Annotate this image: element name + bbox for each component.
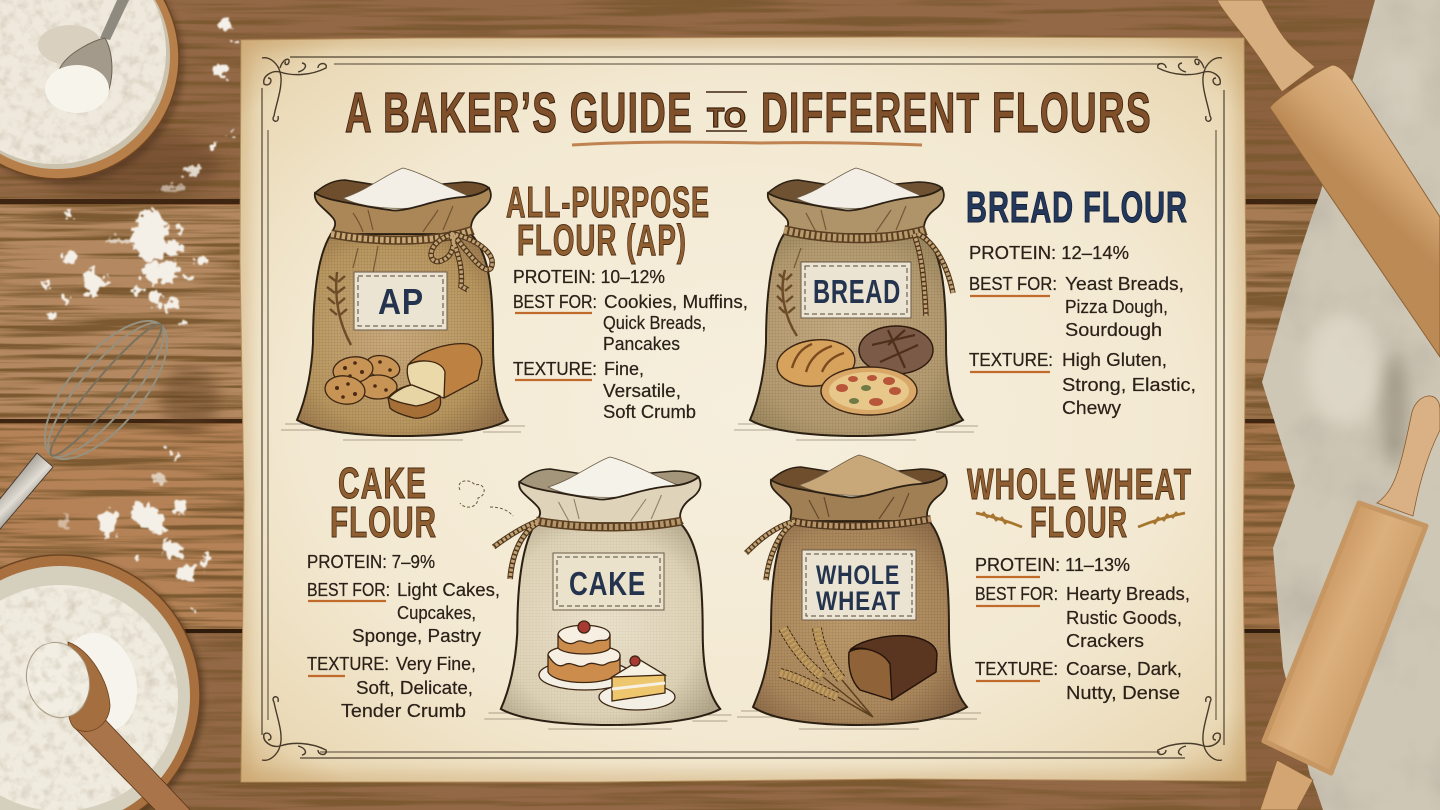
text: cake flour: CAKE [338, 459, 427, 508]
text: all-purpose flour: BEST FOR: [513, 291, 597, 312]
title [345, 81, 1152, 145]
text: cake flour: Light Cakes, [397, 580, 500, 600]
icon: dark loaf [849, 636, 937, 700]
icon: wheat ears [976, 512, 1185, 527]
parchment panel [240, 37, 1246, 782]
text: cake flour: TEXTURE: [307, 653, 389, 674]
sack: bread [734, 168, 978, 440]
corner flourish bottom left [262, 697, 326, 760]
label: whole wheat [802, 550, 916, 620]
text: whole wheat flour: Nutty, Dense [1066, 683, 1180, 703]
text: whole wheat flour: BEST FOR: [975, 583, 1058, 604]
text: bread flour: Pizza Dough, [1065, 297, 1168, 317]
title: DIFFERENT FLOURS [761, 81, 1152, 145]
text: all-purpose flour: TEXTURE: [513, 358, 597, 379]
text: all-purpose flour: Fine, [604, 359, 644, 379]
icon: loaf of bread [388, 344, 482, 418]
text: cake flour: Very Fine, [396, 654, 476, 674]
text: all-purpose flour: Soft Crumb [603, 402, 696, 422]
text: cake flour: BEST FOR: [307, 579, 390, 600]
icon: cookies [323, 352, 402, 407]
label: whole wheat: WHEAT [816, 586, 901, 616]
text: whole wheat flour [967, 460, 1192, 703]
text: whole wheat flour: Hearty Breads, [1066, 584, 1190, 604]
sack: cake [484, 457, 732, 729]
label: bread: BREAD [813, 273, 901, 310]
text: bread flour: BEST FOR: [969, 273, 1057, 294]
bowl of flour top left [0, 0, 184, 184]
text: whole wheat flour: Crackers [1066, 631, 1144, 651]
icon: layered cake [539, 621, 631, 690]
text: whole wheat flour: PROTEIN: 11–13% [975, 554, 1130, 575]
title: TO [707, 102, 746, 133]
corner flourish top left [262, 58, 326, 121]
text: cake flour: Sponge, Pastry [352, 626, 481, 646]
text: cake flour: Tender Crumb [341, 701, 466, 721]
icon: cake slice [599, 656, 675, 710]
text: cake flour: Cupcakes, [397, 603, 476, 623]
icon: wheat sprig [327, 272, 351, 345]
text: whole wheat flour: WHOLE WHEAT [967, 460, 1192, 509]
text: bread flour: PROTEIN: 12–14% [969, 242, 1129, 263]
corner flourish bottom right [1158, 697, 1222, 760]
text: bread flour: Chewy [1062, 398, 1121, 418]
flour spills on table [40, 19, 240, 615]
text: all-purpose flour: ALL-PURPOSE [506, 178, 710, 227]
label: cake: CAKE [569, 565, 646, 602]
text: all-purpose flour: FLOUR (AP) [517, 216, 687, 265]
text: bread flour: Yeast Breads, [1065, 274, 1184, 294]
label: AP [354, 272, 447, 330]
icon: wheat stalks [780, 628, 873, 717]
whisk [0, 302, 188, 535]
icon: round loaf [775, 336, 857, 390]
sack: all-purpose [281, 168, 525, 440]
text: all-purpose flour: PROTEIN: 10–12% [513, 266, 665, 287]
rolling pin top right [1217, 0, 1440, 357]
icon: dark boule [859, 326, 933, 374]
label: cake [553, 553, 664, 610]
icon: dust puff with arrow [459, 481, 513, 516]
linen towel [1262, 0, 1440, 810]
icon: wheat sprig [777, 270, 797, 336]
text: bread flour: BREAD FLOUR [966, 183, 1188, 232]
text: whole wheat flour: TEXTURE: [975, 658, 1058, 679]
text: cake flour: Soft, Delicate, [356, 678, 473, 698]
title: A BAKER’S GUIDE [345, 81, 693, 145]
label: bread [801, 262, 911, 318]
text: bread flour: Strong, Elastic, [1062, 375, 1196, 395]
text: bread flour: Sourdough [1065, 320, 1162, 340]
rolling pin bottom right [1260, 396, 1440, 810]
text: whole wheat flour: Rustic Goods, [1066, 608, 1182, 628]
decorative double border [262, 57, 1224, 758]
sack: whole wheat [737, 455, 981, 729]
text: cake flour: PROTEIN: 7–9% [307, 551, 435, 572]
text: bread flour [966, 183, 1196, 418]
icon: wooden spoon [18, 635, 195, 810]
bowl of flour bottom left [0, 555, 204, 810]
text: all-purpose flour: Pancakes [603, 334, 680, 354]
text: bread flour: High Gluten, [1062, 350, 1167, 370]
text: cake flour [307, 459, 500, 721]
text: all-purpose flour [506, 178, 748, 422]
text: whole wheat flour: Coarse, Dark, [1066, 659, 1182, 679]
text: cake flour: FLOUR [330, 498, 437, 547]
icon: pizza [821, 367, 917, 415]
text: all-purpose flour: Versatile, [603, 381, 681, 401]
text: all-purpose flour: Quick Breads, [603, 313, 706, 333]
corner flourish top right [1158, 58, 1222, 121]
icon: spoon [45, 0, 130, 113]
label: whole wheat: WHOLE [816, 560, 900, 590]
text: bread flour: TEXTURE: [969, 349, 1053, 370]
text: all-purpose flour: Cookies, Muffins, [604, 292, 748, 312]
label: AP: AP [378, 281, 424, 322]
text: whole wheat flour: FLOUR [1030, 498, 1128, 547]
